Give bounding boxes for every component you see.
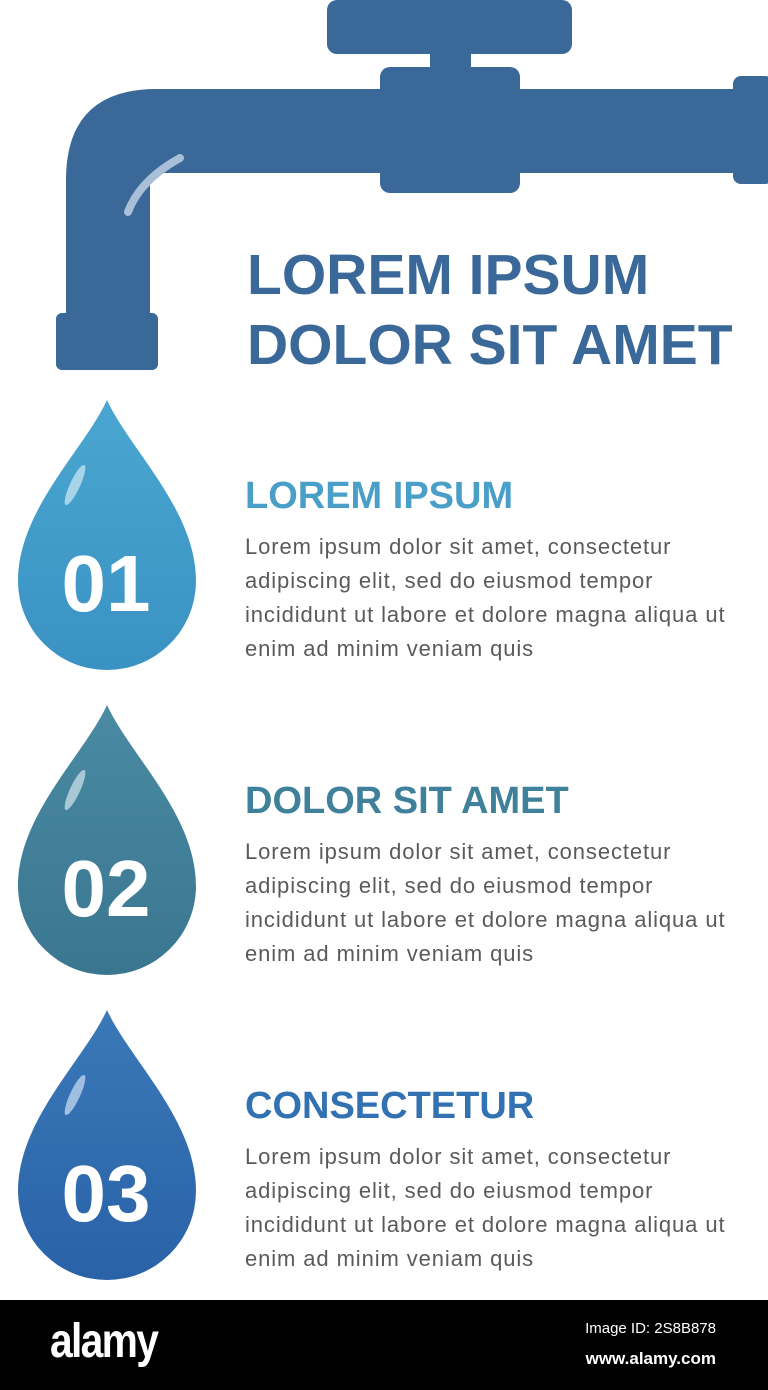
title bbox=[247, 243, 733, 377]
text 2: adipiscing elit, sed do eiusmod tempor bbox=[245, 873, 653, 898]
text 3: adipiscing elit, sed do eiusmod tempor bbox=[245, 1178, 653, 1203]
heading 2: DOLOR SIT AMET bbox=[245, 780, 569, 822]
text 1: Lorem ipsum dolor sit amet, consectetur bbox=[245, 534, 671, 559]
drop 02: 02 bbox=[62, 844, 150, 933]
drop 03 bbox=[18, 1010, 196, 1280]
drop 01 bbox=[18, 400, 196, 670]
heading 1: LOREM IPSUM bbox=[245, 475, 513, 517]
text 1: incididunt ut labore et dolore magna aliqua ut bbox=[245, 602, 725, 627]
heading 3: CONSECTETUR bbox=[245, 1085, 534, 1127]
text 2: enim ad minim veniam quis bbox=[245, 941, 534, 966]
faucet bbox=[56, 0, 768, 370]
text 3: incididunt ut labore et dolore magna aliqua ut bbox=[245, 1212, 725, 1237]
text 1: adipiscing elit, sed do eiusmod tempor bbox=[245, 568, 653, 593]
title: LOREM IPSUM bbox=[247, 243, 649, 307]
text 1: enim ad minim veniam quis bbox=[245, 636, 534, 661]
drop 02 bbox=[18, 705, 196, 975]
text 3: Lorem ipsum dolor sit amet, consectetur bbox=[245, 1144, 671, 1169]
footer logo: alamy bbox=[50, 1315, 157, 1368]
footer id: Image ID: 2S8B878 bbox=[585, 1320, 716, 1337]
text 2 bbox=[245, 839, 725, 966]
footer id bbox=[585, 1320, 716, 1368]
text 2: Lorem ipsum dolor sit amet, consectetur bbox=[245, 839, 671, 864]
title: DOLOR SIT AMET bbox=[247, 313, 733, 377]
text 3 bbox=[245, 1144, 725, 1271]
footer id: www.alamy.com bbox=[586, 1349, 716, 1368]
drop 01: 01 bbox=[62, 539, 150, 628]
footer bar bbox=[0, 1300, 768, 1390]
drop 03: 03 bbox=[62, 1149, 150, 1238]
text 1 bbox=[245, 534, 725, 661]
text 3: enim ad minim veniam quis bbox=[245, 1246, 534, 1271]
text 2: incididunt ut labore et dolore magna aliqua ut bbox=[245, 907, 725, 932]
